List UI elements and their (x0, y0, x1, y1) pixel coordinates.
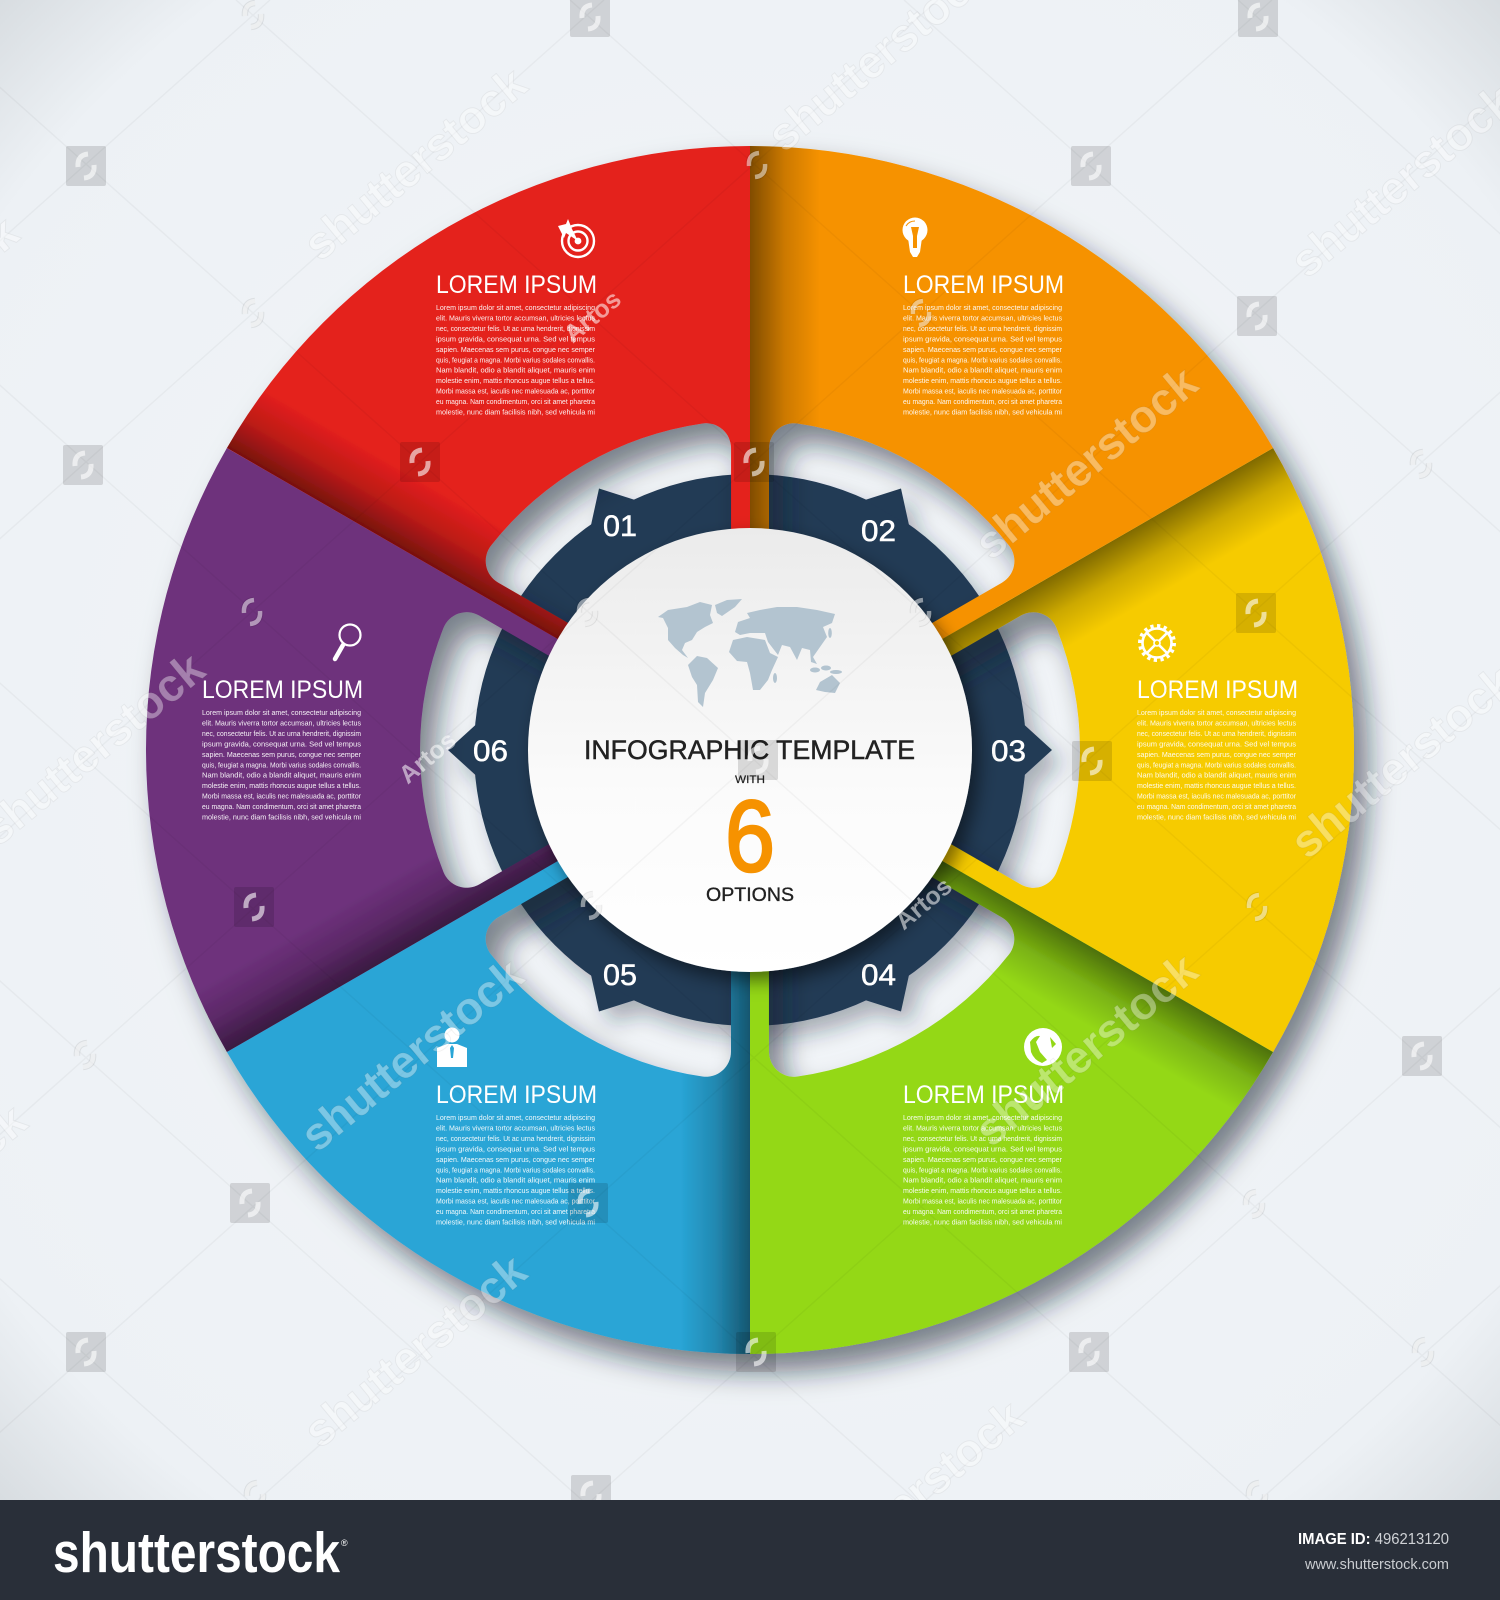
text panel 03: quis, feugiat a magna. Morbi varius sodales convallis. (1137, 760, 1296, 769)
text panel 01: elit. Mauris viverra tortor accumsan, ultricies lectus (436, 313, 595, 322)
text panel 01: Morbi massa est, iaculis nec malesuada ac, porttitor (436, 387, 595, 396)
text panel 04: quis, feugiat a magna. Morbi varius sodales convallis. (903, 1165, 1062, 1174)
text panel 01: nec, consectetur felis. Ut ac urna hendrerit, dignissim (436, 324, 595, 333)
footer logo: shutterstock (53, 1521, 340, 1585)
text panel 05: quis, feugiat a magna. Morbi varius sodales convallis. (436, 1165, 595, 1174)
text panel 05: Nam blandit, odio a blandit aliquet, mauris enim (436, 1176, 595, 1185)
text panel 03: eu magna. Nam condimentum, orci sit amet pharetra (1137, 802, 1297, 811)
text panel 03: molestie enim, mattis rhoncus augue tellus a tellus. (1137, 781, 1296, 790)
text panel 02: molestie enim, mattis rhoncus augue tellus a tellus. (903, 376, 1062, 385)
text panel 01: sapien. Maecenas sem purus, congue nec semper (436, 345, 595, 354)
website: www.shutterstock.com (1304, 1557, 1449, 1573)
text panel 06: quis, feugiat a magna. Morbi varius sodales convallis. (202, 760, 361, 769)
registered mark: ® (341, 1538, 348, 1548)
text panel 03: elit. Mauris viverra tortor accumsan, ultricies lectus (1137, 718, 1296, 727)
text panel 02: molestie, nunc diam facilisis nibh, sed vehicula mi (903, 408, 1062, 416)
text panel 01: Lorem ipsum dolor sit amet, consectetur adipiscing (436, 303, 595, 312)
text panel 06: sapien. Maecenas sem purus, congue nec semper (202, 750, 361, 759)
text panel 02: sapien. Maecenas sem purus, congue nec semper (903, 345, 1062, 354)
text panel 04: LOREM IPSUM (903, 1081, 1064, 1109)
watermark overlay: Artos (559, 285, 627, 348)
text panel 02: elit. Mauris viverra tortor accumsan, ultricies lectus (903, 313, 1062, 322)
text panel 04: sapien. Maecenas sem purus, congue nec semper (903, 1155, 1062, 1164)
ring numbers (473, 510, 1026, 992)
text panel 04 (903, 1081, 1064, 1226)
number 05: 05 (603, 959, 637, 992)
text panel 02 (903, 271, 1064, 416)
wedge: 06 purple (140, 448, 570, 1084)
text panel 03: Lorem ipsum dolor sit amet, consectetur adipiscing (1137, 708, 1296, 717)
text panel 05: LOREM IPSUM (436, 1081, 597, 1109)
text panel 02: LOREM IPSUM (903, 271, 1064, 299)
wedge: 05 blue (227, 750, 750, 1360)
text panel 04: nec, consectetur felis. Ut ac urna hendrerit, dignissim (903, 1134, 1062, 1143)
text panel 05: molestie, nunc diam facilisis nibh, sed vehicula mi (436, 1218, 595, 1226)
watermark overlay: shutterstock (790, 1389, 1033, 1600)
text panel 04: elit. Mauris viverra tortor accumsan, ultricies lectus (903, 1123, 1062, 1132)
text panel 06: elit. Mauris viverra tortor accumsan, ultricies lectus (202, 718, 361, 727)
text panel 01 (436, 271, 597, 416)
number 06: 06 (473, 735, 508, 768)
wedge: 04 green (744, 861, 1302, 1392)
text panel 02: ipsum gravida, consequat urna. Sed vel tempus (903, 334, 1062, 343)
text panel 01: eu magna. Nam condimentum, orci sit amet pharetra (436, 397, 596, 406)
icon: globe (1024, 1028, 1062, 1066)
text panel 06: LOREM IPSUM (202, 676, 363, 704)
text panel 04: molestie enim, mattis rhoncus augue tellus a tellus. (903, 1186, 1062, 1195)
text panel 06: Morbi massa est, iaculis nec malesuada ac, porttitor (202, 792, 361, 801)
text panel 03: sapien. Maecenas sem purus, congue nec semper (1137, 750, 1296, 759)
icon: target (558, 219, 594, 257)
text panel 05: Lorem ipsum dolor sit amet, consectetur adipiscing (436, 1113, 595, 1122)
watermark overlay: Artos (890, 872, 958, 935)
text panel 05: Morbi massa est, iaculis nec malesuada ac, porttitor (436, 1197, 595, 1206)
text panel 04: Morbi massa est, iaculis nec malesuada ac, porttitor (903, 1197, 1062, 1206)
center circle (528, 528, 972, 972)
text panel 01: quis, feugiat a magna. Morbi varius sodales convallis. (436, 355, 595, 364)
watermark overlay: shutterstock (290, 947, 533, 1161)
big number 6: 6 (725, 781, 775, 893)
text panel 03: ipsum gravida, consequat urna. Sed vel tempus (1137, 739, 1296, 748)
text panel 05: sapien. Maecenas sem purus, congue nec semper (436, 1155, 595, 1164)
text panel 03: Morbi massa est, iaculis nec malesuada ac, porttitor (1137, 792, 1296, 801)
icon: magnifier (335, 624, 360, 659)
text panel 01: ipsum gravida, consequat urna. Sed vel tempus (436, 334, 595, 343)
text panel 03: nec, consectetur felis. Ut ac urna hendrerit, dignissim (1137, 729, 1296, 738)
text panel 02: nec, consectetur felis. Ut ac urna hendrerit, dignissim (903, 324, 1062, 333)
text panel 06: molestie, nunc diam facilisis nibh, sed vehicula mi (202, 812, 361, 822)
text panel 02: Lorem ipsum dolor sit amet, consectetur adipiscing (903, 303, 1062, 312)
icon: light bulb (902, 218, 928, 257)
number 03: 03 (991, 735, 1026, 768)
text panel 05: eu magna. Nam condimentum, orci sit amet pharetra (436, 1207, 596, 1216)
text panel 02: Nam blandit, odio a blandit aliquet, mauris enim (903, 366, 1062, 375)
center label: with: WITH (735, 774, 765, 786)
watermark overlay: shutterstock (964, 942, 1207, 1156)
wedge: 02 orange (750, 140, 1273, 750)
center label: options: OPTIONS (706, 884, 794, 906)
wedge: 01 red (226, 144, 798, 639)
text panel 05: molestie enim, mattis rhoncus augue tellus a tellus. (436, 1186, 595, 1195)
number 04: 04 (861, 959, 896, 992)
text panel 06: ipsum gravida, consequat urna. Sed vel tempus (202, 739, 361, 748)
image id: IMAGE ID: 496213120 (1298, 1531, 1449, 1548)
text panel 02: eu magna. Nam condimentum, orci sit amet pharetra (903, 397, 1063, 406)
text panel 03 (1137, 676, 1298, 822)
icon: businessman (437, 1028, 467, 1067)
text panel 06: Nam blandit, odio a blandit aliquet, mauris enim (202, 771, 361, 780)
number 01: 01 (603, 510, 637, 543)
text panel 06: Lorem ipsum dolor sit amet, consectetur adipiscing (202, 708, 361, 717)
wedge: 03 yellow (942, 440, 1388, 1098)
text panel 02: Morbi massa est, iaculis nec malesuada ac, porttitor (903, 387, 1062, 396)
text panel 01: Nam blandit, odio a blandit aliquet, mauris enim (436, 366, 595, 375)
watermark overlay: shutterstock (964, 355, 1207, 569)
text panel 01: molestie, nunc diam facilisis nibh, sed vehicula mi (436, 408, 595, 416)
text panel 02: quis, feugiat a magna. Morbi varius sodales convallis. (903, 355, 1062, 364)
text panel 05 (436, 1081, 597, 1226)
text panel 03: molestie, nunc diam facilisis nibh, sed vehicula mi (1137, 812, 1296, 822)
text panel 06 (202, 676, 363, 822)
footer bar (0, 1500, 1500, 1600)
text panel 04: Nam blandit, odio a blandit aliquet, mauris enim (903, 1176, 1062, 1185)
six coloured wedge segments (140, 144, 1388, 1392)
number 02: 02 (861, 515, 896, 548)
text panel 03: Nam blandit, odio a blandit aliquet, mauris enim (1137, 771, 1296, 780)
text panel 04: molestie, nunc diam facilisis nibh, sed vehicula mi (903, 1218, 1062, 1226)
watermark overlay: shutterstock (293, 56, 536, 270)
world map (658, 599, 842, 707)
dark gear ring with numbered tabs (448, 474, 1052, 1026)
text panel 05: elit. Mauris viverra tortor accumsan, ultricies lectus (436, 1123, 595, 1132)
text panel 06: nec, consectetur felis. Ut ac urna hendrerit, dignissim (202, 729, 361, 738)
text panel 03: LOREM IPSUM (1137, 676, 1298, 704)
text panel 04: Lorem ipsum dolor sit amet, consectetur adipiscing (903, 1113, 1062, 1122)
text panel 01: molestie enim, mattis rhoncus augue tellus a tellus. (436, 376, 595, 385)
text panel 04: eu magna. Nam condimentum, orci sit amet pharetra (903, 1207, 1063, 1216)
text panel 05: nec, consectetur felis. Ut ac urna hendrerit, dignissim (436, 1134, 595, 1143)
center title: INFOGRAPHIC TEMPLATE (584, 735, 915, 765)
text panel 05: ipsum gravida, consequat urna. Sed vel tempus (436, 1144, 595, 1153)
text panel 06: eu magna. Nam condimentum, orci sit amet pharetra (202, 802, 362, 811)
text panel 06: molestie enim, mattis rhoncus augue tellus a tellus. (202, 781, 361, 790)
watermark overlay: Artos (394, 726, 462, 789)
text panel 01: LOREM IPSUM (436, 271, 597, 299)
icon: gear (1140, 626, 1174, 660)
text panel 04: ipsum gravida, consequat urna. Sed vel tempus (903, 1144, 1062, 1153)
watermark overlay: shutterstock (293, 1243, 536, 1457)
